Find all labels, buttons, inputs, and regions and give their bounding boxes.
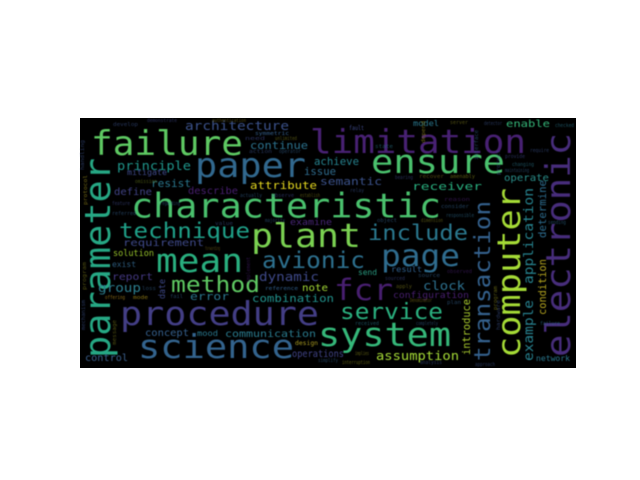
- small filler words: observe: [272, 193, 295, 199]
- small filler words: apply: [396, 284, 413, 290]
- small filler words: received: [355, 321, 379, 327]
- word: technique: technique: [119, 219, 250, 244]
- word: system: system: [318, 315, 451, 354]
- small filler words: value: [215, 221, 234, 227]
- word: service: service: [340, 300, 443, 325]
- panel background: [80, 118, 576, 368]
- small filler words: unlimited: [275, 136, 297, 142]
- small filler words: plan: [447, 300, 461, 306]
- word: attribute: attribute: [250, 179, 317, 192]
- small filler words: Denominator: [410, 298, 432, 304]
- word: computer: computer: [490, 188, 528, 358]
- word: include: include: [368, 221, 468, 246]
- word: failure: failure: [91, 124, 243, 164]
- small filler words: mechanism: [81, 299, 87, 330]
- small filler words: protect: [496, 150, 502, 175]
- word: group: group: [98, 281, 141, 295]
- word: examine: examine: [290, 218, 332, 228]
- small filler words: completely: [416, 321, 438, 327]
- small filler words: provide: [505, 154, 526, 160]
- small filler words: observed: [447, 269, 472, 275]
- small filler words: offering: [105, 295, 125, 301]
- word cloud words: [78, 118, 578, 368]
- small filler words: reason: [444, 197, 470, 203]
- small filler words: relay: [350, 188, 365, 194]
- small filler words: majority: [265, 218, 285, 224]
- small filler words: interruption: [342, 360, 370, 366]
- small filler words: state: [375, 144, 394, 150]
- word: dynamic: dynamic: [259, 269, 319, 284]
- small filler words: loss: [142, 286, 156, 292]
- word: communication: communication: [225, 329, 316, 340]
- word: semantic: semantic: [320, 175, 382, 188]
- small filler words: dimension: [421, 218, 443, 224]
- word: operate: operate: [504, 173, 549, 184]
- word: date: date: [158, 279, 168, 299]
- word: result: result: [391, 265, 422, 274]
- small filler words: bearing: [395, 175, 413, 181]
- word: mood: mood: [197, 329, 218, 338]
- word: report: report: [112, 272, 153, 283]
- word: concept: concept: [145, 328, 189, 339]
- small filler words: operator: [279, 149, 302, 155]
- word: fcr: fcr: [334, 273, 393, 307]
- small filler words: handling: [80, 140, 86, 170]
- small filler words: hardware: [496, 299, 502, 330]
- word: continue: continue: [250, 139, 308, 152]
- word: mean: mean: [156, 241, 243, 280]
- word: science: science: [138, 327, 294, 366]
- small filler words: depend: [421, 121, 427, 143]
- word: transaction: transaction: [471, 201, 496, 361]
- word: page: page: [381, 239, 460, 274]
- word: combination: combination: [252, 292, 334, 305]
- small filler words: actually: [240, 193, 263, 199]
- small filler words: consider: [441, 204, 470, 210]
- word: send: send: [358, 268, 377, 277]
- small filler words: establish: [300, 193, 320, 199]
- word: design: design: [295, 339, 318, 347]
- small filler words: failure: [540, 321, 561, 327]
- word: receiver: receiver: [412, 180, 482, 193]
- word: introduce: introduce: [461, 299, 473, 355]
- small filler words: checked: [555, 123, 574, 129]
- word: resist: resist: [151, 177, 191, 190]
- word: issue: issue: [304, 165, 336, 178]
- word: control: control: [85, 353, 128, 364]
- word: procedure: procedure: [120, 294, 319, 333]
- small filler words: server: [450, 120, 469, 126]
- small filler words: fail: [170, 294, 183, 300]
- small filler words: feature: [112, 201, 130, 207]
- small filler words: object: [377, 218, 397, 224]
- word: enable: enable: [506, 119, 550, 130]
- small filler words: forwarding: [205, 246, 220, 252]
- word: electronic: electronic: [539, 133, 578, 357]
- small filler words: approach: [475, 362, 495, 368]
- small filler words: [80, 118, 574, 368]
- word: method: method: [171, 273, 260, 298]
- word: mitigate: mitigate: [127, 168, 168, 177]
- small filler words: mode: [133, 295, 149, 301]
- small filler words: program: [493, 285, 499, 310]
- word: exist: exist: [112, 260, 136, 269]
- small filler words: implies: [355, 351, 369, 357]
- word: model: model: [413, 119, 439, 128]
- small filler words: develop: [113, 122, 139, 128]
- word: example: example: [522, 300, 537, 361]
- word: error: error: [190, 290, 229, 303]
- word: symmetric: symmetric: [255, 131, 289, 137]
- word: requirement: requirement: [123, 238, 204, 249]
- small filler words: recover: [419, 174, 445, 180]
- word: network: network: [536, 354, 571, 363]
- small filler words: need: [245, 136, 265, 142]
- word: plant: plant: [251, 216, 361, 255]
- small filler words: analysis: [420, 360, 442, 366]
- small filler words: simplify: [318, 358, 338, 364]
- word: describe: describe: [188, 186, 238, 197]
- small filler words: referred: [112, 211, 136, 217]
- small filler words: implement: [246, 257, 252, 283]
- small filler words: sourced: [385, 276, 405, 282]
- word: solution: solution: [113, 249, 154, 259]
- small filler words: changing: [512, 162, 534, 168]
- small filler words: program: [82, 261, 88, 290]
- small filler words: action: [249, 149, 272, 155]
- word: note: note: [302, 283, 328, 294]
- small filler words: maintaining: [505, 168, 529, 174]
- small filler words: responsible: [446, 213, 474, 219]
- small filler words: sending: [548, 220, 566, 226]
- small filler words: message: [112, 319, 118, 345]
- word: configuration: configuration: [393, 291, 469, 301]
- small filler words: protocol: [83, 175, 89, 205]
- word: achieve: achieve: [314, 155, 359, 168]
- small filler words: source: [418, 273, 441, 279]
- word: assumption: assumption: [376, 349, 459, 363]
- word: paper: paper: [195, 146, 306, 186]
- word: reference: reference: [265, 286, 299, 292]
- word: characteristic: characteristic: [131, 186, 441, 226]
- small filler words: require: [530, 148, 550, 154]
- small filler words: regarding: [160, 201, 180, 207]
- word: operations: operations: [292, 349, 344, 360]
- word: fault: fault: [349, 124, 364, 132]
- word: ensure: ensure: [371, 142, 505, 181]
- word: determine: determine: [537, 180, 549, 238]
- small filler words: omission: [135, 179, 157, 185]
- small filler words: demonstrate: [147, 118, 178, 124]
- word: clock: clock: [423, 279, 466, 293]
- small filler words: amenably: [450, 174, 476, 180]
- small filler words: detector: [484, 121, 502, 127]
- word: principle: principle: [117, 159, 191, 173]
- word: application: application: [522, 188, 537, 284]
- word: condition: condition: [537, 259, 549, 315]
- word: architecture: architecture: [185, 118, 289, 133]
- small filler words: authentication: [212, 118, 246, 124]
- word: parameter: parameter: [78, 158, 119, 358]
- word: define: define: [114, 187, 152, 198]
- word: avionic: avionic: [262, 248, 365, 274]
- small filler words: interface: [474, 129, 480, 160]
- word: limitation: limitation: [310, 122, 526, 161]
